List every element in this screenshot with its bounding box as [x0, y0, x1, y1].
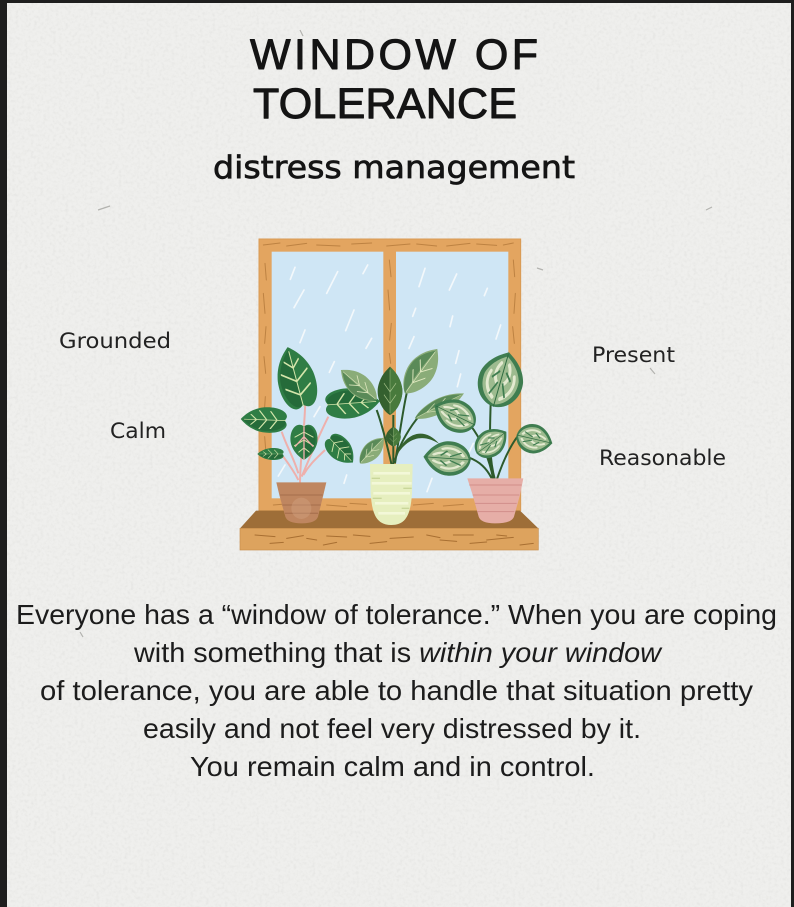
title	[250, 31, 538, 128]
title: TOLERANCE	[253, 80, 517, 128]
label: Present: Present	[592, 343, 675, 367]
pot: terracotta	[276, 482, 326, 523]
pot: pink	[467, 478, 523, 523]
body paragraph: of tolerance, you are able to handle that situation pretty	[40, 675, 753, 706]
title: WINDOW OF	[250, 31, 538, 79]
window sill	[240, 511, 538, 550]
rain streaks	[278, 265, 501, 492]
label: Grounded: Grounded	[59, 329, 171, 353]
body paragraph	[16, 599, 777, 782]
label: Calm: Calm	[110, 419, 166, 443]
body paragraph: with something that is within your window	[133, 637, 663, 668]
window frame	[259, 239, 521, 511]
subtitle: distress management	[213, 150, 575, 186]
plant: right variegated	[422, 346, 556, 480]
body paragraph: Everyone has a “window of tolerance.” When you are coping	[16, 599, 777, 630]
body paragraph: You remain calm and in control.	[190, 751, 595, 782]
plant: centre dark-leaf	[334, 341, 467, 469]
label: Reasonable: Reasonable	[599, 446, 726, 470]
body paragraph: easily and not feel very distressed by it.	[143, 713, 641, 744]
illustration: window with three potted plants	[240, 239, 556, 550]
pot: pale green	[370, 464, 413, 525]
plant: left pink-stem	[240, 342, 381, 484]
